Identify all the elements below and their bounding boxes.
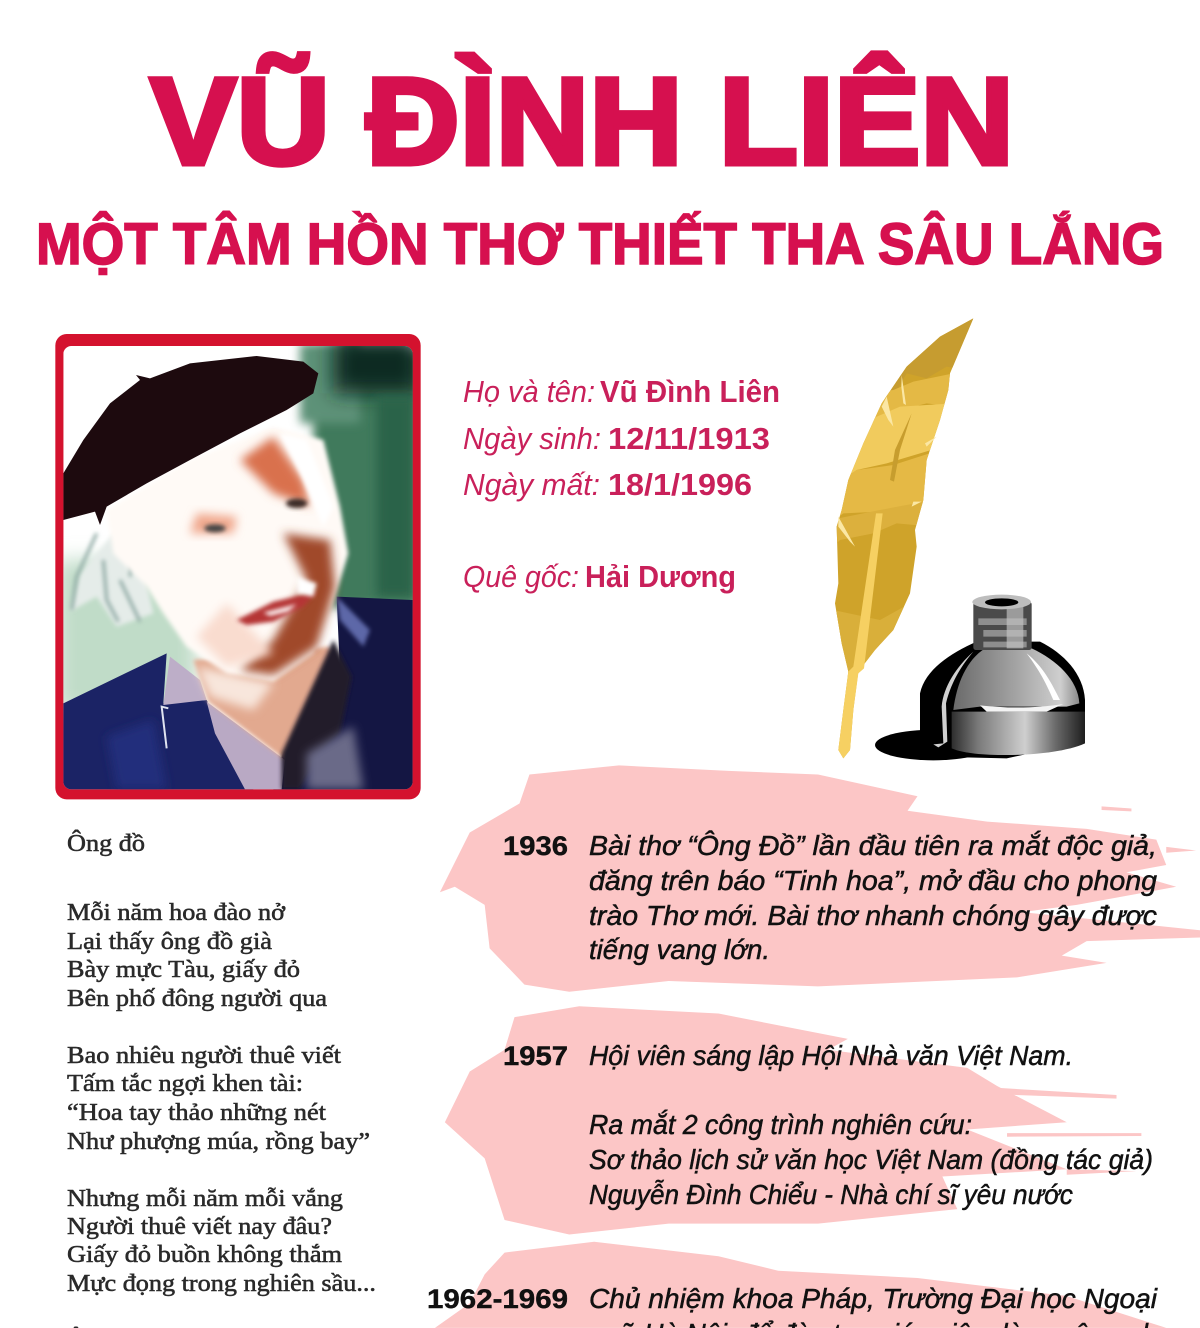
death date: 18/1/1996 <box>608 467 752 502</box>
entry 1936: trào Thơ mới. Bài thơ nhanh chóng gây được <box>589 900 1157 931</box>
stanza 3: Mực đọng trong nghiên sầu... <box>67 1271 376 1297</box>
stanza 2: “Hoa tay thảo những nét <box>67 1100 326 1126</box>
entry 1936 <box>503 830 1157 965</box>
birth date <box>463 421 770 456</box>
entry 1957 <box>503 1040 1153 1210</box>
entry 1936: đăng trên báo “Tinh hoa”, mở đầu cho phong <box>589 865 1157 896</box>
entry 1962-1969 <box>427 1283 1158 1328</box>
stanza 3: Giấy đỏ buồn không thắm <box>67 1242 342 1268</box>
photo frame <box>55 334 421 799</box>
panel: poem Ông đồ <box>67 830 376 1328</box>
entry 1957: 1957 <box>503 1041 568 1071</box>
birth date: Ngày sinh: <box>463 421 601 456</box>
face <box>107 427 348 682</box>
bottle neck <box>973 602 1032 650</box>
panel: personal info <box>463 374 780 594</box>
entry 1957: Hội viên sáng lập Hội Nhà văn Việt Nam. <box>589 1040 1073 1071</box>
hair <box>70 533 153 627</box>
entry 1962-1969: 1962-1969 <box>427 1284 568 1314</box>
entry 1957: Ra mắt 2 công trình nghiên cứu: <box>589 1109 972 1140</box>
neck <box>193 647 340 760</box>
bottle base <box>952 712 1085 755</box>
panel: timeline <box>427 765 1200 1328</box>
entry 1957: Nguyễn Đình Chiểu - Nhà chí sĩ yêu nước <box>589 1179 1073 1210</box>
birth date: 12/11/1913 <box>608 421 770 456</box>
entry 1936: 1936 <box>503 831 568 861</box>
icon: golden feather quill <box>830 317 980 763</box>
stanza 3: Nhưng mỗi năm mỗi vắng <box>67 1186 343 1212</box>
stanza 1 <box>67 900 327 1012</box>
stanza 2: Bao nhiêu người thuê viết <box>67 1043 341 1069</box>
poem title: Ông đồ <box>67 830 145 857</box>
full name: Họ và tên: <box>463 374 595 409</box>
death date <box>463 467 752 502</box>
shirt <box>163 657 207 705</box>
bottle dome <box>953 648 1079 710</box>
feather shaft <box>838 513 883 758</box>
full name <box>463 374 780 409</box>
stanza 2 <box>67 1043 370 1155</box>
stanza 1: Bày mực Tàu, giấy đỏ <box>67 957 300 983</box>
entry 1936: Bài thơ “Ông Đồ” lần đầu tiên ra mắt độc giả, <box>589 830 1157 861</box>
icon: ink bottle <box>875 595 1085 760</box>
stanza 2: Tấm tắc ngợi khen tài: <box>67 1071 303 1097</box>
ink pool <box>875 730 992 760</box>
stanza 1: Bên phố đông người qua <box>67 986 327 1012</box>
beret <box>63 356 318 525</box>
entry 1936: tiếng vang lớn. <box>589 934 770 965</box>
stanza 1: Lại thấy ông đồ già <box>67 929 272 955</box>
entry 1962-1969: Chủ nhiệm khoa Pháp, Trường Đại học Ngoại <box>589 1283 1158 1314</box>
hometown: Quê gốc: <box>463 559 579 594</box>
hometown: Hải Dương <box>585 559 736 594</box>
jacket <box>63 653 253 789</box>
title: VŨ ĐÌNH LIÊN <box>150 52 1014 191</box>
stanza 3 <box>67 1186 376 1297</box>
stanza 3: Người thuê viết nay đâu? <box>67 1214 332 1240</box>
entry 1957: Sơ thảo lịch sử văn học Việt Nam (đồng tác giả) <box>589 1144 1153 1175</box>
stanza 2: Như phượng múa, rồng bay” <box>67 1129 370 1155</box>
brush stroke backgrounds <box>435 765 1200 1328</box>
subtitle: MỘT TÂM HỒN THƠ THIẾT THA SÂU LẮNG <box>36 212 1164 277</box>
panel: portrait photo <box>55 334 421 799</box>
death date: Ngày mất: <box>463 467 600 502</box>
portrait painting <box>57 337 420 789</box>
stanza 1: Mỗi năm hoa đào nở <box>67 900 285 926</box>
full name: Vũ Đình Liên <box>600 374 780 409</box>
hometown <box>463 559 736 594</box>
